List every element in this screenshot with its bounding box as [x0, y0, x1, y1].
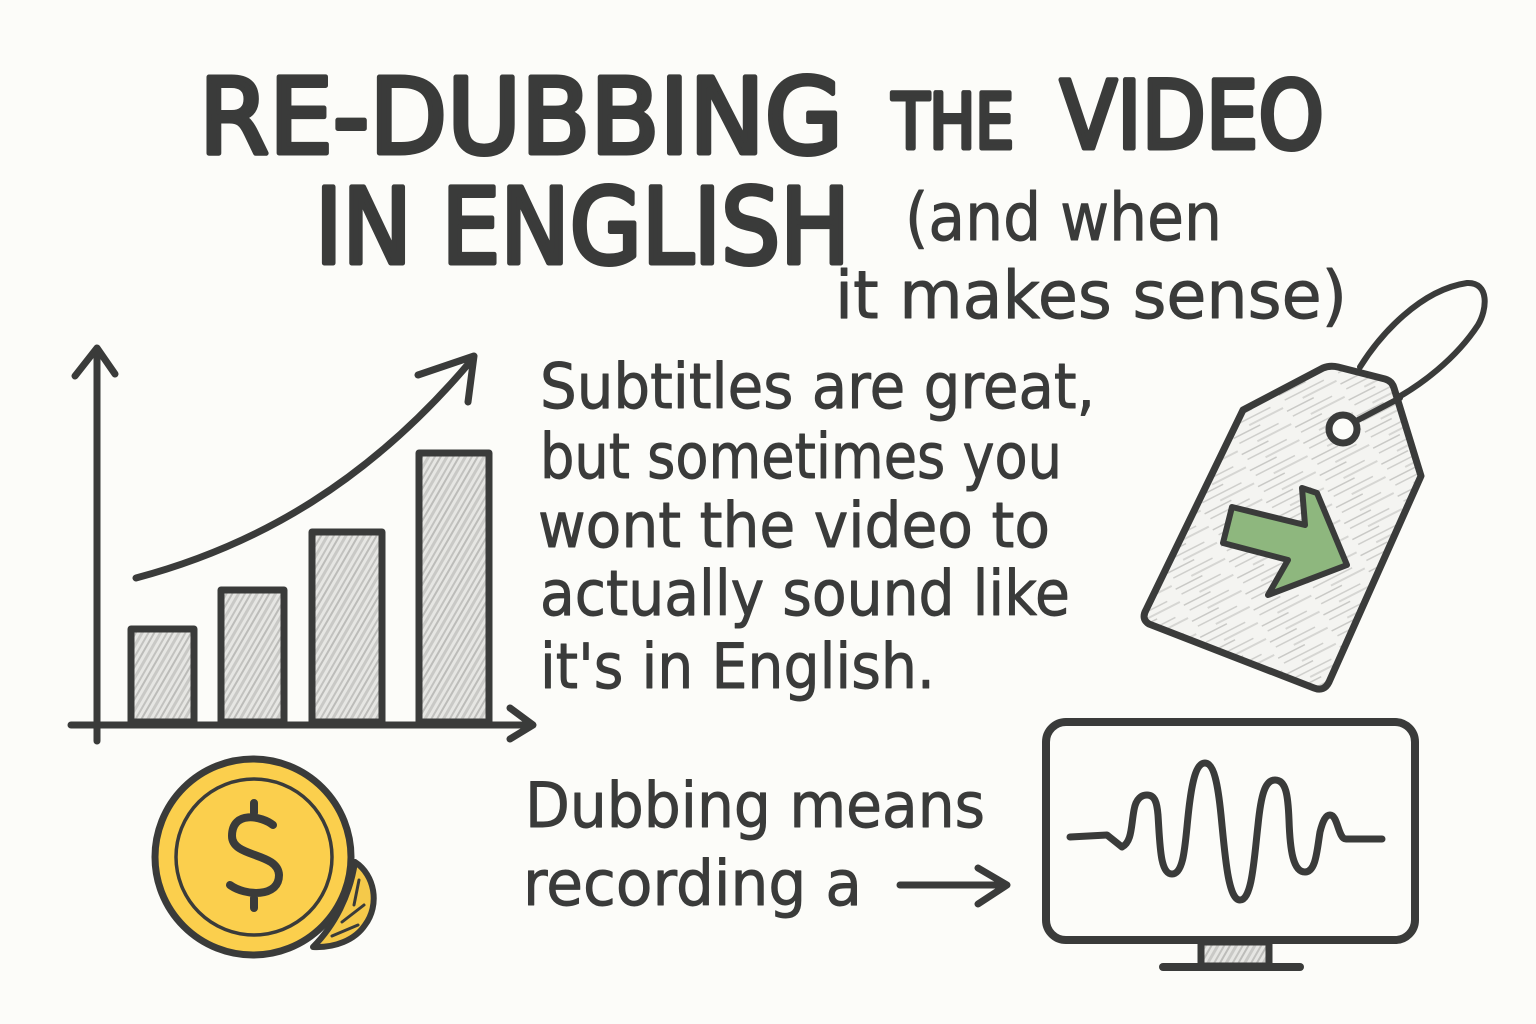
chart axes	[71, 348, 533, 741]
green arrow	[1223, 488, 1347, 595]
paragraph: subtitles: but sometimes you	[540, 420, 1062, 493]
icon: monitor with waveform	[1046, 722, 1415, 967]
chart bars	[131, 453, 489, 722]
paragraph: subtitles: it's in English.	[540, 630, 935, 703]
monitor stand	[1201, 942, 1269, 966]
subtitle: and when it makes sense	[835, 179, 1347, 334]
text: dubbing means recording a: Dubbing means	[525, 769, 985, 842]
paragraph: subtitles: actually sound like	[540, 557, 1070, 630]
paragraph: subtitles: Subtitles are great,	[540, 350, 1095, 423]
coin edge streaks	[332, 880, 364, 936]
title: RE-DUBBING	[199, 56, 843, 178]
subtitle: and when it makes sense: (and when	[905, 179, 1222, 256]
tag loop string back	[1360, 283, 1485, 398]
icon: price tag with green arrow	[1144, 283, 1485, 689]
title: VIDEO	[1060, 62, 1324, 171]
subtitle: and when it makes sense: it makes sense)	[835, 257, 1347, 334]
waveform	[1070, 763, 1382, 900]
tag body	[1144, 366, 1421, 689]
text: dubbing means recording a: recording a	[523, 847, 862, 920]
arrow to monitor	[900, 868, 1007, 904]
paragraph: subtitles: wont the video to	[538, 489, 1050, 562]
title	[199, 56, 1324, 288]
bar chart with rising arrow	[71, 348, 533, 741]
monitor screen	[1046, 722, 1415, 940]
tag hole	[1329, 415, 1357, 443]
dollar sign	[230, 803, 279, 908]
tag loop string front	[1358, 398, 1400, 420]
text: dubbing means recording a	[523, 769, 985, 920]
title: IN ENGLISH	[315, 166, 850, 288]
rising trend arrow	[136, 356, 474, 578]
title: THE	[891, 77, 1014, 166]
coin face	[155, 759, 351, 955]
paragraph: subtitles	[538, 350, 1095, 703]
stacked coin edge	[313, 862, 374, 947]
icon: gold coin	[155, 759, 374, 955]
